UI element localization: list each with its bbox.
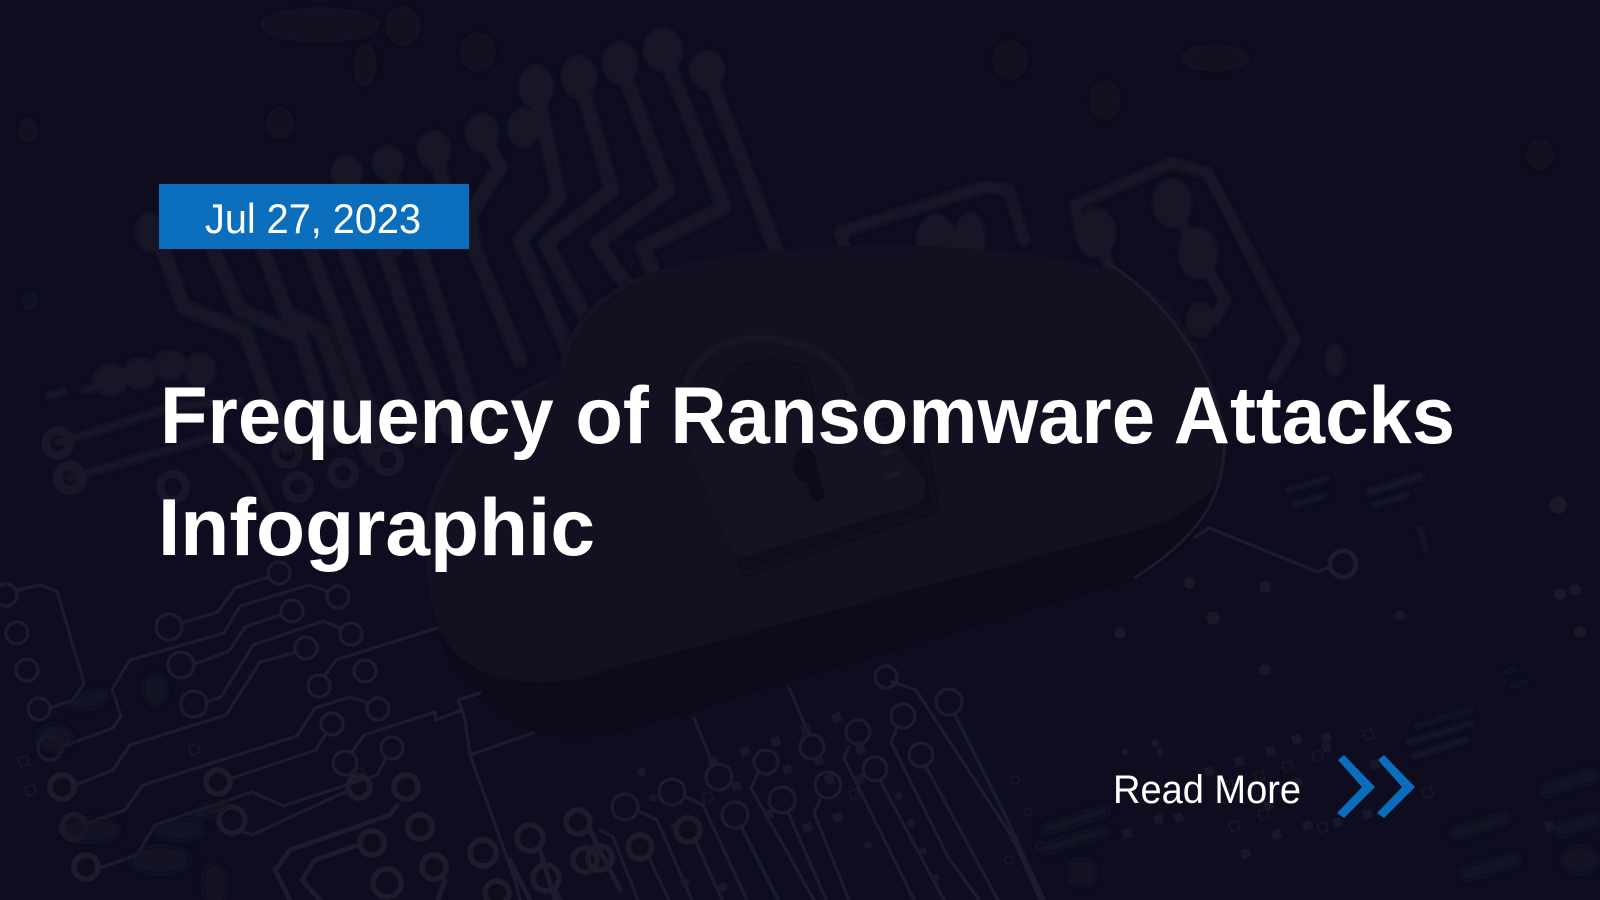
background: scattered pads and squares (18, 496, 1586, 892)
background: PCB detail left (44, 350, 400, 510)
read more link: Read More (1113, 768, 1301, 812)
padlock body (687, 395, 926, 557)
padlock body shadow (700, 420, 938, 575)
cloud rim (1106, 262, 1224, 578)
background: circuit traces lower center (588, 666, 1044, 900)
background: blurred foreground components bottom right (37, 674, 1600, 900)
background: cloud padlock (425, 246, 1227, 739)
title: Frequency of Ransomware Attacks (160, 371, 1455, 461)
cloud shadow underside (425, 246, 1227, 739)
background: right circuit trace with ring (1195, 528, 1356, 577)
background: circuit traces lower left (0, 562, 620, 900)
icon: double chevron arrow (1337, 755, 1415, 818)
title: Infographic (158, 483, 595, 573)
date badge (159, 184, 469, 249)
background: out-of-focus circuit traces top (18, 6, 1554, 460)
background: blurred components (1285, 471, 1528, 760)
padlock keyhole (793, 448, 826, 503)
padlock shackle (684, 338, 853, 430)
title (158, 371, 1455, 573)
date badge: Jul 27, 2023 (205, 195, 421, 242)
cloud face (425, 246, 1227, 682)
